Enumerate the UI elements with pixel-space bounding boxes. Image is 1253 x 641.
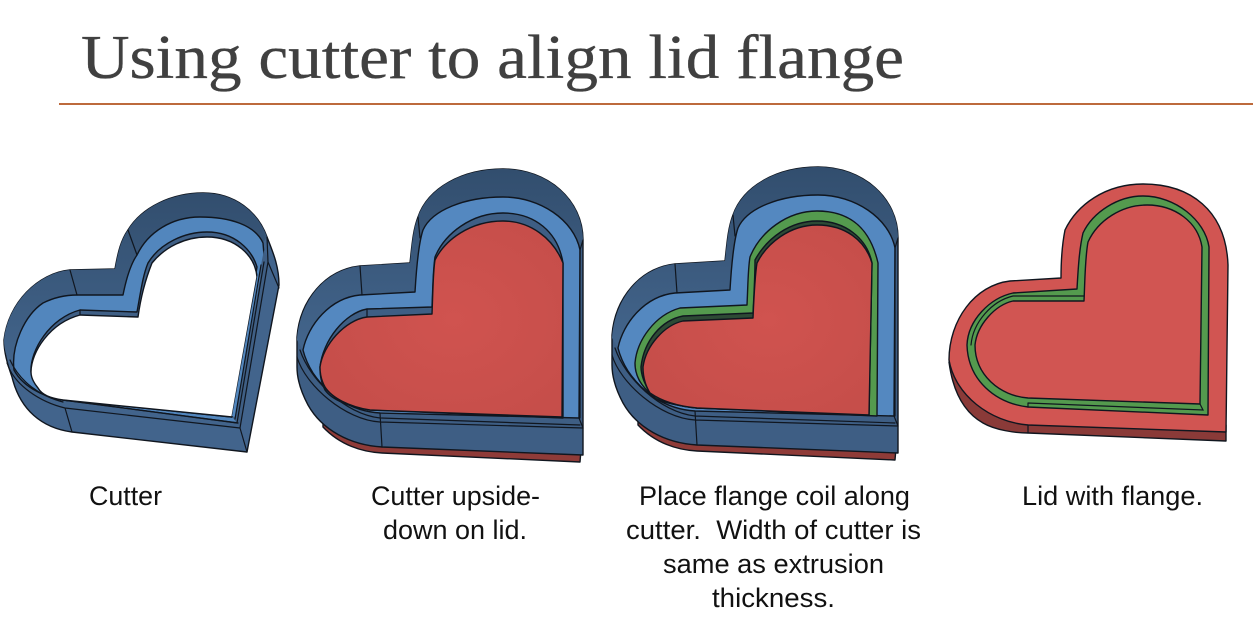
blue top face bbox=[303, 197, 580, 418]
wall segment and rim lines bbox=[7, 230, 279, 452]
back wall bbox=[4, 193, 267, 370]
red lid edge bbox=[323, 420, 581, 462]
caption: place flange coil: cutter. Width of cutter is bbox=[626, 515, 921, 545]
inner wall bbox=[31, 232, 257, 417]
green flange bbox=[967, 196, 1209, 415]
blue top face bbox=[14, 217, 264, 423]
title rule bbox=[59, 103, 1253, 105]
caption: place flange coil: Place flange coil along bbox=[639, 481, 910, 511]
heart 4: lid with flange bbox=[949, 184, 1228, 441]
caption: place flange coil: thickness. bbox=[712, 583, 835, 613]
heart 1: cutter bbox=[4, 193, 279, 452]
blue top face bbox=[618, 195, 895, 416]
title: Using cutter to align lid flange bbox=[81, 24, 904, 92]
caption: cutter: Cutter bbox=[89, 481, 162, 511]
red lid bbox=[320, 221, 563, 417]
caption: cutter upside-down on lid: down on lid. bbox=[383, 515, 527, 545]
red interior bbox=[975, 205, 1202, 404]
heart 2: cutter upside-down on lid bbox=[297, 169, 583, 462]
back wall bbox=[612, 167, 898, 348]
inner wall bbox=[320, 213, 563, 418]
flange detail lines bbox=[971, 296, 1203, 433]
cutter and lid bbox=[612, 167, 898, 460]
caption: lid with flange: Lid with flange. bbox=[1022, 481, 1203, 511]
caption: cutter upside-down on lid bbox=[371, 481, 540, 545]
wall segment and rim lines bbox=[612, 215, 898, 445]
outer wall silhouette bbox=[4, 193, 279, 452]
green flange bbox=[635, 211, 878, 416]
right rim sliver bbox=[233, 250, 268, 427]
lid top face bbox=[949, 184, 1228, 432]
caption: cutter upside-down on lid: Cutter upside- bbox=[371, 481, 540, 511]
caption: place flange coil: same as extrusion bbox=[663, 549, 884, 579]
red lid interior bbox=[643, 225, 872, 415]
cutter silhouette bbox=[297, 169, 583, 455]
hole bbox=[31, 237, 257, 417]
wall segment and rim lines bbox=[297, 217, 583, 447]
red lid edge bbox=[638, 418, 896, 460]
cutter silhouette bbox=[612, 167, 898, 453]
flange inner side bbox=[641, 221, 872, 415]
caption: place flange coil bbox=[626, 481, 921, 613]
lid side bbox=[949, 360, 1226, 441]
heart 3: flange coil along cutter bbox=[612, 167, 898, 460]
back wall bbox=[297, 169, 583, 350]
